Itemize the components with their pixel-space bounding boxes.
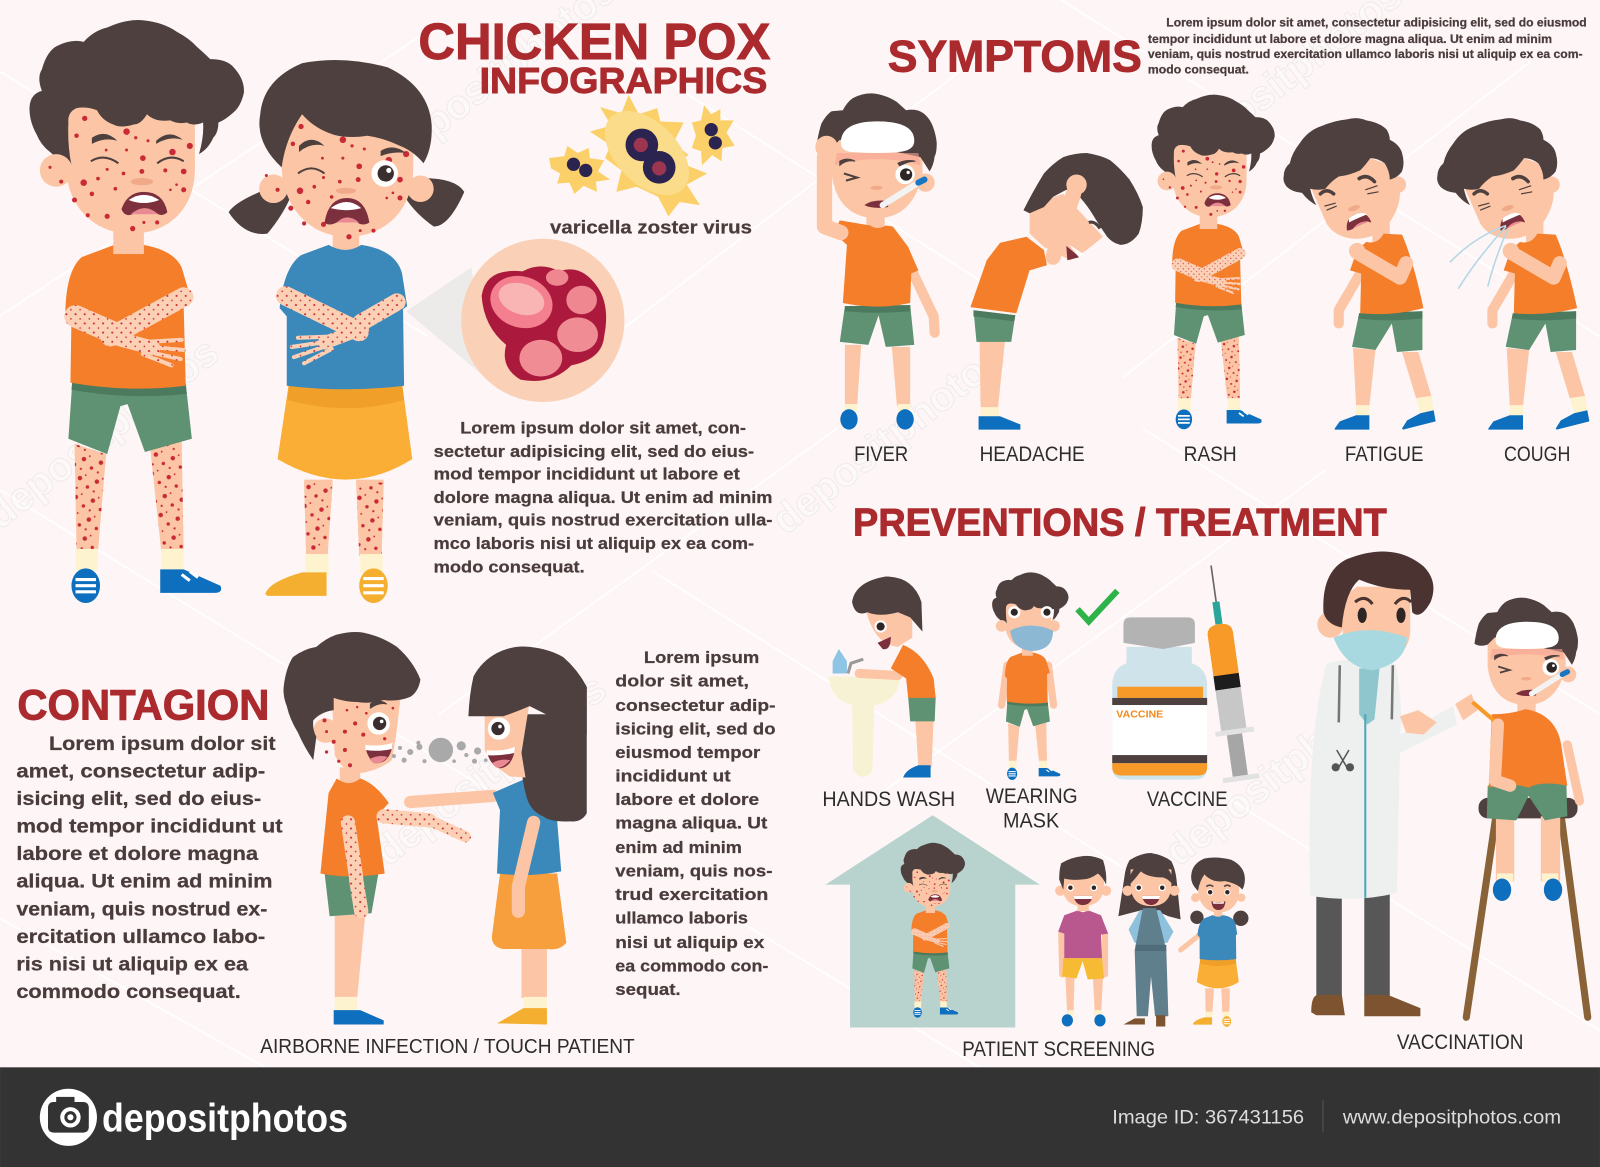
screening label: PATIENT SCREENING (962, 1037, 1155, 1061)
text block: contagion right: sequat. (615, 980, 681, 999)
text block: contagion right: ea commodo con- (615, 956, 768, 975)
text block: symptoms: modo consequat. (1148, 63, 1249, 76)
symptom labels: COUGH (1504, 442, 1570, 466)
heading: preventions: PREVENTIONS / TREATMENT (853, 502, 1387, 545)
watermark pattern: depositphotos (365, 665, 615, 874)
contagion boy (283, 632, 465, 1024)
symptom: rash (1152, 95, 1275, 429)
text block: symptoms (1148, 17, 1587, 76)
text block: contagion right: enim ad minim (615, 838, 742, 857)
contagion scene: boy coughing on girl (283, 632, 587, 1024)
footer bar: www.depositphotos.com (1342, 1106, 1561, 1128)
text block: contagion left: veniam, quis nostrud ex- (16, 898, 267, 920)
text block: contagion right: consectetur adip- (615, 696, 776, 715)
text block: contagion left: isicing elit, sed do eius- (16, 788, 261, 810)
symptom labels: FIVER (854, 442, 908, 466)
text block: contagion left: ris nisi ut aliquip ex ea (16, 953, 248, 975)
title: INFOGRAPHICS (480, 61, 767, 101)
skin lesion magnifier (406, 239, 624, 402)
symptom labels: FATIGUE (1345, 442, 1423, 466)
text block: symptoms: Lorem ipsum dolor sit amet, consectetur adipisicing elit, sed do eiusmod (1166, 17, 1587, 30)
symptom: cough (1437, 118, 1589, 430)
prevention labels (822, 784, 1228, 833)
watermark pattern: depositphotos (1156, 665, 1406, 874)
text block: contagion right: labore et dolore (615, 790, 759, 809)
footer bar: Image ID: 367431156 (1112, 1106, 1304, 1128)
contagion caption: AIRBORNE INFECTION / TOUCH PATIENT (260, 1036, 635, 1058)
prevention labels: MASK (1003, 809, 1060, 833)
text block: intro: dolore magna aliqua. Ut enim ad minim (434, 488, 772, 507)
icon: viruses (549, 95, 735, 216)
text block: contagion right: incididunt ut (615, 767, 731, 786)
prevention: vaccine vial: VACCINE (1116, 709, 1163, 720)
symptom: fever (815, 93, 937, 430)
text block: contagion right: magna aliqua. Ut (615, 814, 768, 833)
prevention: wearing mask (992, 572, 1117, 780)
text block: contagion left (16, 733, 283, 1003)
symptom labels: RASH (1184, 442, 1237, 466)
text block: contagion left: mod tempor incididunt ut (16, 816, 283, 838)
girl in blue (1181, 857, 1248, 1027)
text block: intro: mod tempor incididunt ut labore et (434, 465, 740, 484)
girl with overalls (1118, 853, 1181, 1026)
prevention: vaccine vial (1112, 617, 1207, 780)
boy in magenta (1055, 856, 1111, 1026)
text block: contagion left: aliqua. Ut enim ad minim (16, 871, 272, 893)
virus caption: varicella zoster virus (550, 217, 752, 238)
vaccination label: VACCINATION (1397, 1030, 1523, 1054)
girl with rash (229, 60, 464, 603)
patient on stool (1466, 598, 1588, 1017)
heading: symptoms: SYMPTOMS (888, 30, 1142, 81)
healthy children (1055, 853, 1248, 1027)
text block: symptoms: tempor incididunt ut labore et dolore magna aliqua. Ut enim ad minim (1148, 33, 1552, 46)
text block: contagion right: nisi ut aliquip ex (615, 933, 765, 952)
text block: intro: modo consequat. (434, 557, 585, 576)
text block: contagion left: Lorem ipsum dolor sit (49, 733, 276, 755)
text block: contagion right: ullamco laboris (615, 908, 748, 927)
prevention labels: HANDS WASH (822, 787, 955, 811)
text block: contagion left: amet, consectetur adip- (16, 761, 265, 783)
text block: contagion right: Lorem ipsum (644, 648, 759, 667)
title: CHICKEN POX (418, 13, 770, 70)
text block: contagion right: eiusmod tempor (615, 743, 761, 762)
prevention: syringe (1192, 563, 1261, 783)
text block: intro: Lorem ipsum dolor sit amet, con- (460, 419, 746, 438)
watermark pattern: depositphotos (763, 334, 1013, 543)
text block: symptoms: veniam, quis nostrud exercitation ullamco laboris nisi ut aliquip ex ea com- (1148, 48, 1583, 61)
text block: contagion left: labore et dolore magna (16, 843, 258, 865)
symptom: headache (970, 153, 1143, 430)
text block: intro: sectetur adipisicing elit, sed do eius- (434, 442, 754, 461)
prevention labels: VACCINE (1147, 787, 1228, 811)
icon: depositphotos logo (40, 1089, 97, 1146)
text block: intro: veniam, quis nostrud exercitation ulla- (434, 510, 772, 529)
footer bar (0, 1067, 1600, 1167)
symptom labels (854, 442, 1570, 466)
droplets (392, 738, 488, 764)
text block: contagion right (615, 648, 776, 999)
text block: intro: mco laboris nisi ut aliquip ex ea com- (434, 534, 754, 553)
prevention labels: WEARING (986, 784, 1078, 808)
symptom: fatigue (1283, 118, 1436, 430)
text block: contagion right: veniam, quis nos- (615, 862, 772, 881)
house with isolated patient (826, 815, 1040, 1028)
heading: contagion: CONTAGION (17, 681, 269, 729)
symptom labels: HEADACHE (980, 442, 1085, 466)
text block: intro (434, 419, 772, 576)
title (418, 13, 770, 101)
text block: contagion right: dolor sit amet, (615, 672, 749, 691)
doctor (1310, 551, 1478, 1016)
footer bar: depositphotos (102, 1097, 348, 1141)
text block: contagion left: commodo consequat. (16, 981, 241, 1003)
boy with rash (30, 20, 244, 603)
text block: contagion left: ercitation ullamco labo- (16, 926, 265, 948)
prevention: hands wash (829, 577, 936, 778)
contagion girl (410, 647, 587, 1024)
text block: contagion right: trud exercitation (615, 885, 768, 904)
text block: contagion right: isicing elit, sed do (615, 720, 776, 739)
icon: check mark (1078, 591, 1117, 621)
